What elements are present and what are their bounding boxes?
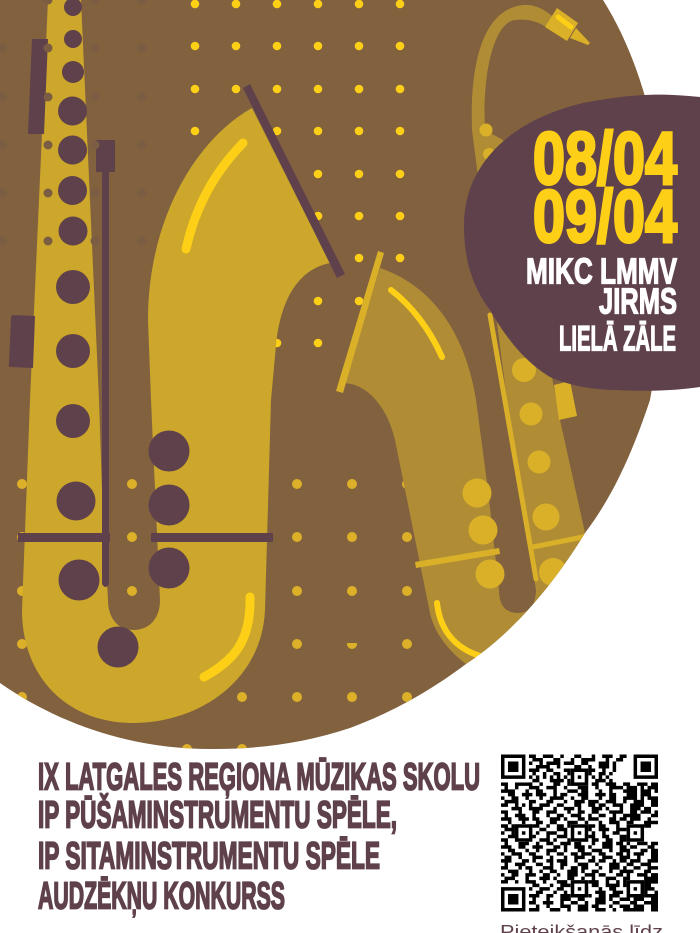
QR code [501,754,658,912]
title: AUDZĒKŅU KONKURSS [38,876,285,918]
middle sax keys [336,251,504,588]
saxophone: left, gold [22,0,330,723]
middle sax highlights [391,290,480,656]
right sax keys [480,124,586,586]
title: IP PŪŠAMINSTRUMENTU SPĒLE, [38,792,397,836]
dates [533,117,677,258]
right sax rod [490,315,536,579]
faint dot column [44,0,100,246]
left sax highlights [186,143,250,677]
left sax keys and rods [9,0,345,668]
date and venue badge [464,95,700,391]
gold dot grid [17,479,412,754]
title: IP SITAMINSTRUMENTU SPĒLE [38,836,380,878]
saxophone: right, pale [336,4,590,664]
title [38,756,480,918]
yellow dot grid [191,0,404,347]
venue [526,250,677,358]
mouthpiece [545,8,590,45]
